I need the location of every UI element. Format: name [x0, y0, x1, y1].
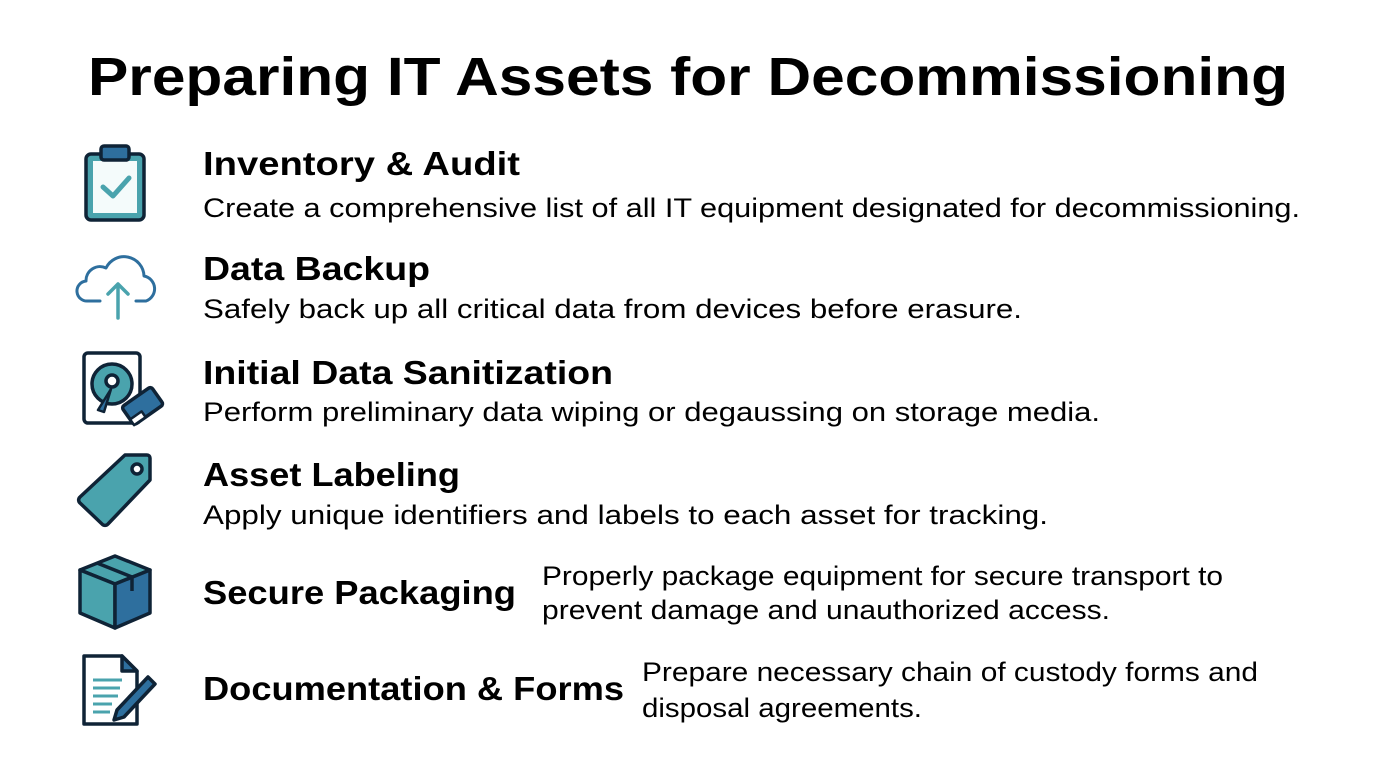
text: packaging	[542, 561, 1223, 625]
text: packaging: Properly package equipment for secure transport to	[542, 561, 1223, 591]
heading: packaging: Secure Packaging	[203, 574, 516, 611]
heading: inventory: Inventory & Audit	[203, 145, 520, 182]
icon: box	[80, 556, 150, 628]
icon: document with pen	[84, 656, 155, 724]
icon: hard drive eraser	[84, 353, 164, 425]
text: inventory: Create a comprehensive list of all IT equipment designated for decommissioning.	[203, 193, 1300, 223]
text: labeling: Apply unique identifiers and labels to each asset for tracking.	[203, 500, 1048, 530]
text: data backup: Safely back up all critical data from devices before erasure.	[203, 294, 1022, 324]
text: packaging: prevent damage and unauthorized access.	[542, 595, 1110, 625]
heading: documentation: Documentation & Forms	[203, 670, 624, 707]
text: documentation: disposal agreements.	[642, 693, 922, 723]
icon: clipboard	[86, 146, 144, 220]
heading: data backup: Data Backup	[203, 250, 430, 287]
title: Preparing IT Assets for Decommissioning	[88, 47, 1288, 107]
heading: sanitization: Initial Data Sanitization	[203, 354, 613, 391]
text: sanitization: Perform preliminary data wiping or degaussing on storage media.	[203, 397, 1100, 427]
text: documentation	[642, 657, 1258, 723]
icon: tag	[79, 455, 150, 525]
icon: cloud upload	[77, 257, 155, 318]
text: documentation: Prepare necessary chain of custody forms and	[642, 657, 1258, 687]
heading: labeling: Asset Labeling	[203, 456, 460, 493]
